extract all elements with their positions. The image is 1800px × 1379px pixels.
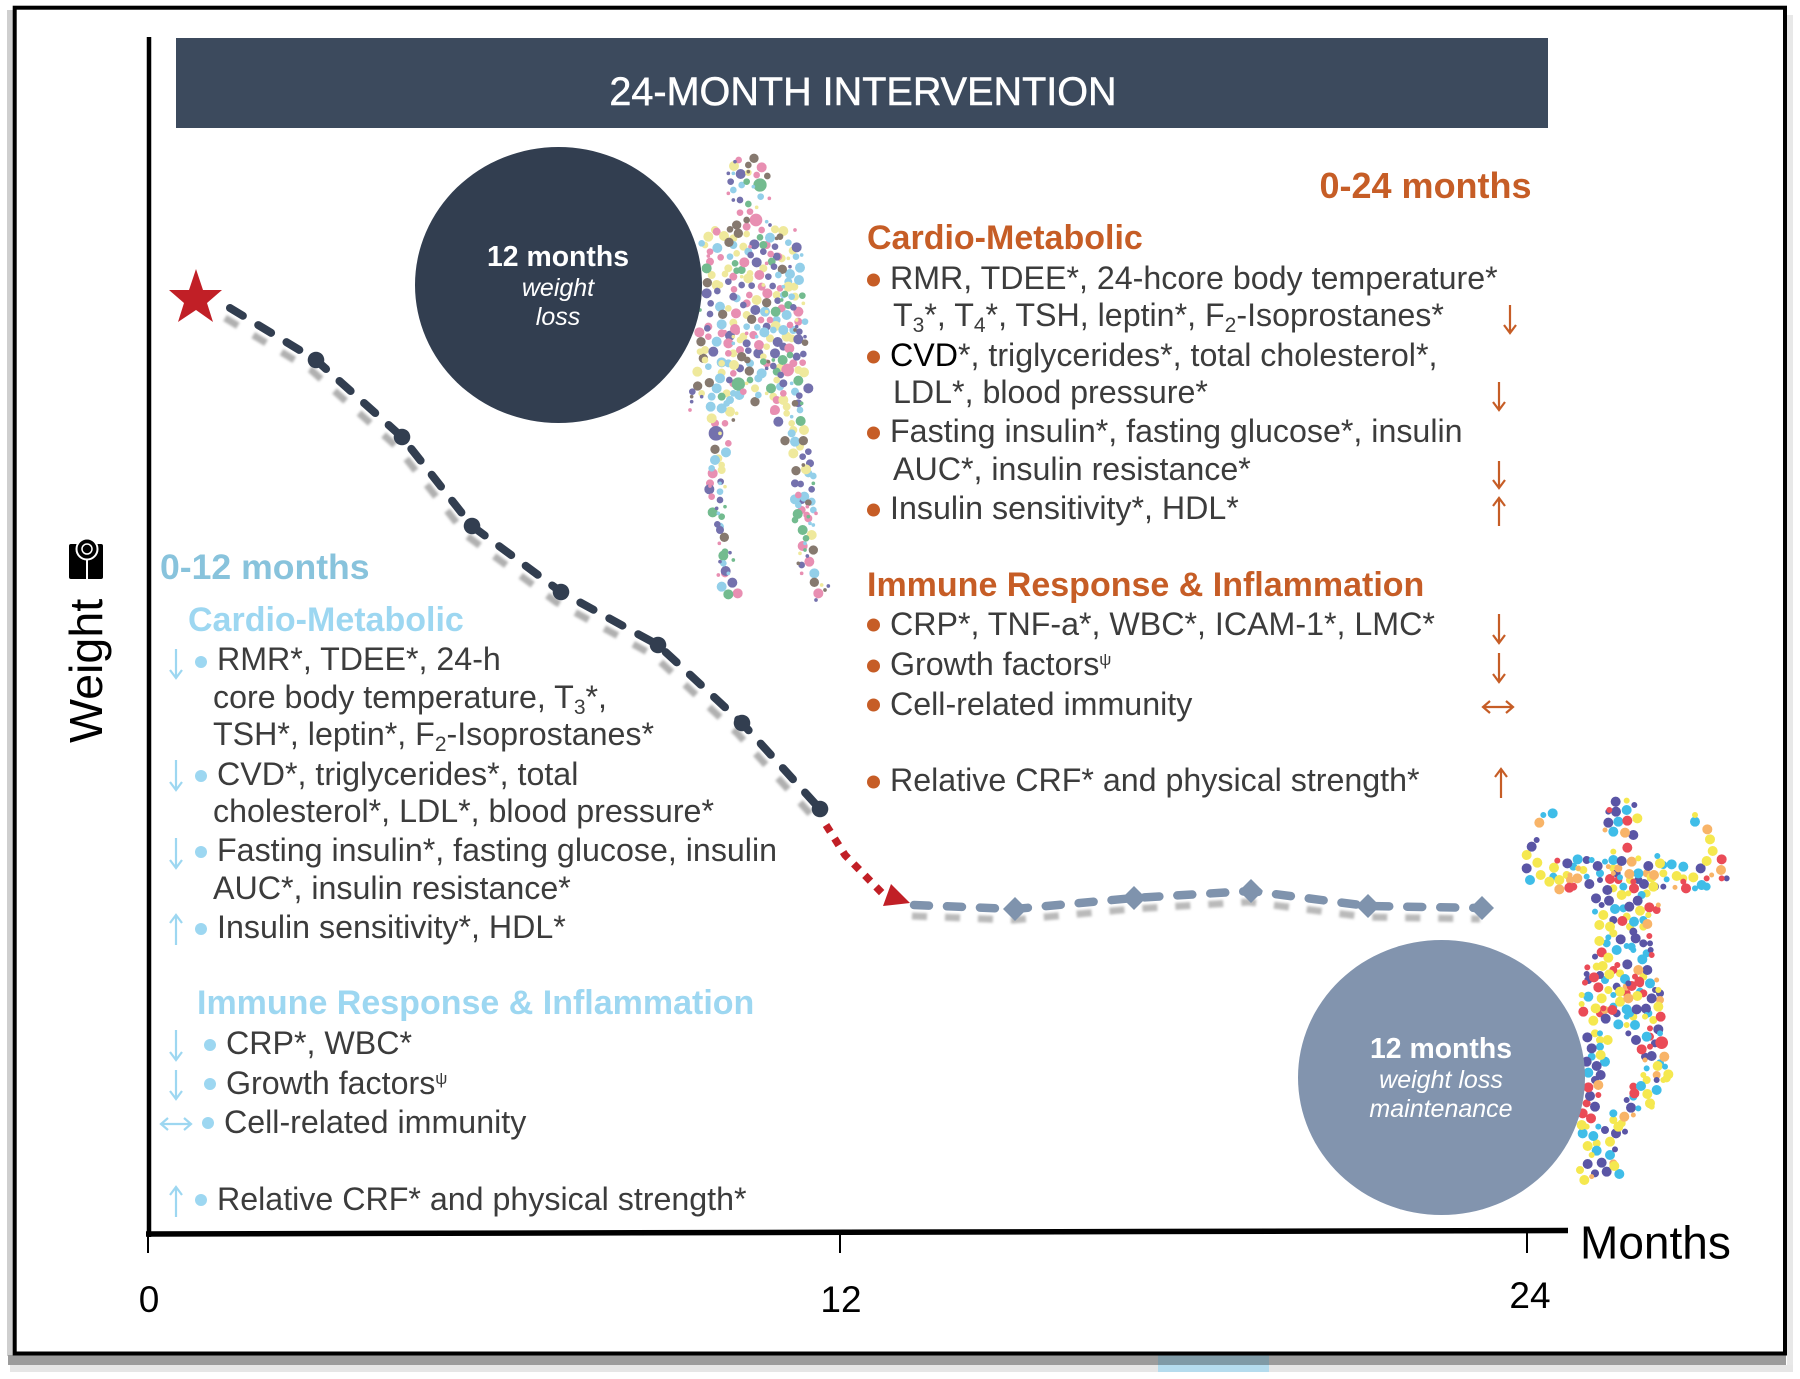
list: immune markers: ψ <box>1099 650 1111 669</box>
list: cardio-metabolic markers <box>867 260 1498 526</box>
circle: 12 months weight loss: loss <box>536 303 580 331</box>
list: cardio-metabolic markers: -Isoprostanes* <box>1236 297 1444 333</box>
x axis labels: 0 <box>139 1279 159 1320</box>
list: cardio-metabolic markers: 3 <box>574 696 586 719</box>
heading: 0-12 months: 0-12 months <box>160 547 370 587</box>
list: immune markers <box>867 606 1435 798</box>
header banner <box>176 38 1548 128</box>
list: immune markers: CRP*, TNF-a*, WBC*, ICAM-1*, LMC* <box>890 606 1435 642</box>
icon: weighing scale <box>69 538 103 579</box>
list: cardio-metabolic markers: AUC*, insulin resistance* <box>893 451 1251 487</box>
icon: immune direction arrows <box>1483 614 1513 798</box>
list: immune markers: Cell-related immunity <box>224 1104 527 1140</box>
list: immune markers: Growth factors <box>226 1065 435 1101</box>
heading: 0-24 months: 0-24 months <box>1320 165 1532 206</box>
header banner: 24-MONTH INTERVENTION <box>609 70 1117 114</box>
y axis label: weight: Weight <box>60 599 112 743</box>
list: immune markers: CRP*, WBC* <box>226 1025 412 1061</box>
icon: cardio-metabolic direction arrows <box>1493 305 1516 526</box>
x axis labels: Months <box>1580 1216 1731 1268</box>
weight trend line: 12-24 months <box>912 879 1494 921</box>
list: cardio-metabolic markers: 4 <box>974 314 986 337</box>
list: cardio-metabolic markers: 3 <box>913 314 924 337</box>
icon: immune direction arrows <box>161 1030 191 1217</box>
panel: 0-12 months results <box>160 547 777 1217</box>
list: cardio-metabolic markers: core body temperature, T <box>213 679 574 715</box>
heading: immune response and inflammation: Immune Response & Inflammation <box>197 984 754 1022</box>
list: immune markers: Relative CRF* and physical strength* <box>890 762 1420 798</box>
icon: cardio-metabolic direction arrows <box>170 649 182 945</box>
circle: 12 months weight loss maintenance <box>1298 940 1585 1215</box>
list: cardio-metabolic markers: T <box>893 297 913 333</box>
list: cardio-metabolic markers: Insulin sensitivity*, HDL* <box>890 490 1239 526</box>
heading: cardio-metabolic: Cardio-Metabolic <box>867 219 1143 257</box>
list: cardio-metabolic markers: AUC*, insulin resistance* <box>213 870 571 906</box>
list: cardio-metabolic markers: Fasting insulin*, fasting glucose, insulin <box>217 832 777 868</box>
heading: immune response and inflammation: Immune Response & Inflammation <box>867 566 1424 604</box>
list: cardio-metabolic markers: *, <box>586 679 607 715</box>
x axis labels: 12 <box>820 1279 862 1320</box>
list: immune markers: ψ <box>435 1069 447 1088</box>
list: cardio-metabolic markers: -Isoprostanes* <box>446 716 655 752</box>
red dotted transition arrow <box>826 825 910 906</box>
list: cardio-metabolic markers: 2 <box>1225 314 1236 337</box>
circle: 12 months weight loss: 12 months <box>487 241 629 273</box>
list: cardio-metabolic markers: CVD*, triglycerides*, total cholesterol*, <box>890 337 1437 373</box>
list: cardio-metabolic markers: RMR*, TDEE*, 24-h <box>217 641 501 677</box>
list: immune markers: Relative CRF* and physical strength* <box>217 1181 747 1217</box>
list: cardio-metabolic markers: Insulin sensitivity*, HDL* <box>217 909 566 945</box>
list: immune markers <box>195 1025 747 1217</box>
panel: 0-24 months results <box>867 165 1532 798</box>
weight trend line: 0-12 months <box>225 308 828 819</box>
circle: 12 months weight loss maintenance: maintenance <box>1369 1095 1513 1123</box>
x axis labels <box>139 1216 1731 1320</box>
list: cardio-metabolic markers: TSH*, leptin*, F <box>213 716 435 752</box>
circle: 12 months weight loss: weight <box>522 274 595 302</box>
axes with ticks <box>146 37 1568 1253</box>
circle: 12 months weight loss maintenance: weight loss <box>1379 1066 1503 1094</box>
list: cardio-metabolic markers: LDL*, blood pressure* <box>893 374 1208 410</box>
list: cardio-metabolic markers: 2 <box>435 733 446 756</box>
list: cardio-metabolic markers: RMR, TDEE*, 24-hcore body temperature* <box>890 260 1498 296</box>
list: cardio-metabolic markers: Fasting insulin*, fasting glucose*, insulin <box>890 413 1463 449</box>
list: immune markers: Cell-related immunity <box>890 686 1193 722</box>
list: cardio-metabolic markers <box>195 641 777 945</box>
list: cardio-metabolic markers: cholesterol*, LDL*, blood pressure* <box>213 793 714 829</box>
circle: 12 months weight loss <box>415 147 702 423</box>
list: cardio-metabolic markers: CVD*, triglycerides*, total <box>217 756 578 792</box>
list: cardio-metabolic markers: *, TSH, leptin*, F <box>986 297 1225 333</box>
list: cardio-metabolic markers: *, T <box>924 297 974 333</box>
heading: cardio-metabolic: Cardio-Metabolic <box>188 601 464 639</box>
icon: red start star <box>169 269 222 322</box>
circle: 12 months weight loss maintenance: 12 months <box>1370 1033 1512 1065</box>
list: immune markers: Growth factors <box>890 646 1099 682</box>
figure: overweight body made of coloured dots <box>690 158 828 600</box>
x axis labels: 24 <box>1509 1275 1551 1316</box>
figure: fit muscular body made of coloured dots <box>1527 801 1727 1180</box>
